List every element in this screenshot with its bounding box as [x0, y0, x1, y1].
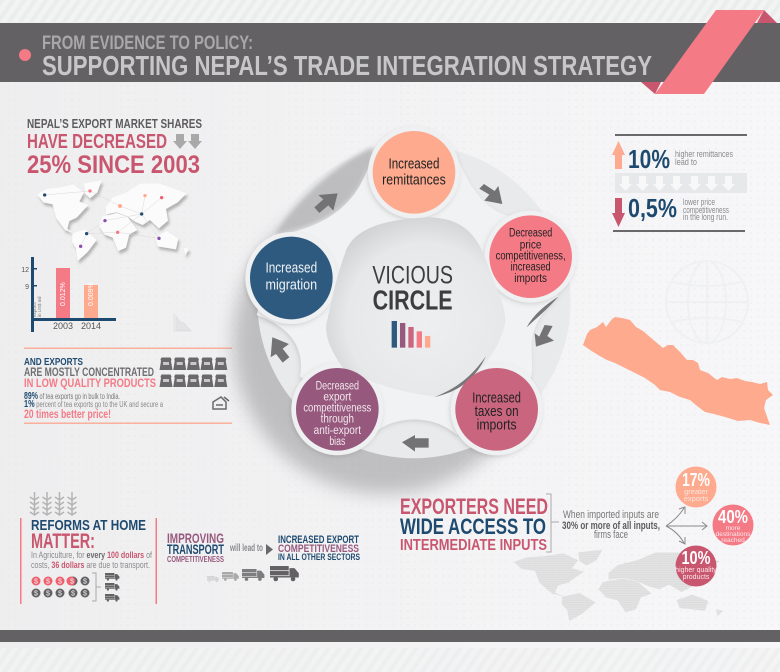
- icon: dollar coins: $: [70, 578, 74, 586]
- icon: globe: [666, 261, 748, 343]
- panel: low quality products: [24, 348, 232, 424]
- text: improving transport: [167, 530, 224, 564]
- circle: increased remittances: Increased: [388, 155, 439, 172]
- header band: [0, 10, 780, 94]
- text block: IN LOW QUALITY PRODUCTS: [24, 378, 156, 390]
- heading: WIDE ACCESS TO: [400, 514, 546, 539]
- bar chart: 0.012%: [60, 282, 67, 306]
- text: increased export: COMPETITIVENESS: [278, 543, 359, 555]
- icon: dollar coins: $: [71, 590, 75, 598]
- circle: decreased price competitiveness: competitiveness,: [496, 248, 566, 262]
- inner well: [326, 217, 505, 397]
- bar chart: exports: [32, 301, 37, 317]
- icon: dollar coins: $: [83, 590, 87, 598]
- connecting plate: [257, 150, 558, 435]
- circle: decreased price competitiveness: Decreased: [509, 226, 552, 240]
- text block: AND EXPORTS: [24, 356, 83, 368]
- stat: 40 percent: reached: [721, 537, 745, 544]
- text block: costs, 36 dollars are due to transport.: [31, 560, 150, 571]
- will lead to: will lead to: [229, 543, 263, 554]
- stat: 10 percent: higher quality: [675, 567, 717, 574]
- text block: 20 times better price!: [24, 407, 111, 421]
- text block: firms face: [594, 529, 628, 541]
- stat: 40 percent: [712, 504, 754, 546]
- circle halos: [245, 126, 577, 455]
- center title: [372, 261, 453, 315]
- circle: decreased export competitiveness: bias: [329, 434, 345, 448]
- text: improving transport: TRANSPORT: [167, 541, 224, 557]
- circle: increased remittances: [373, 131, 455, 214]
- stat: 10 percent: products: [683, 574, 710, 581]
- text block: When imported inputs are: [563, 509, 659, 521]
- circle: decreased price competitiveness: [489, 215, 572, 298]
- circle: increased taxes on imports: taxes on: [475, 403, 519, 420]
- icon: small trucks: [105, 573, 119, 602]
- header bullet: [19, 49, 31, 61]
- icon: dollar coins: $: [46, 578, 50, 586]
- icon: dollar coins: $: [46, 590, 50, 598]
- ribbon: [641, 10, 777, 94]
- circle: decreased export competitiveness: export: [323, 390, 352, 404]
- icon: dollar coins: [32, 576, 90, 598]
- bar chart: [21, 257, 116, 332]
- circle: decreased price competitiveness: increased: [511, 260, 551, 274]
- stat: 17 percent: greater: [684, 487, 708, 496]
- icon: dollar coins: $: [58, 590, 62, 598]
- circle: increased migration: [250, 237, 333, 319]
- footer band: [0, 630, 780, 642]
- heading: REFORMS AT HOME: [31, 517, 146, 534]
- icon: dollar coins: $: [34, 590, 38, 598]
- center title: CIRCLE: [373, 284, 453, 315]
- heading: [31, 517, 146, 553]
- circle: increased migration: migration: [265, 276, 317, 293]
- circle: decreased export competitiveness: through: [321, 412, 354, 426]
- outer disc: [257, 145, 571, 458]
- text block: [24, 356, 163, 421]
- stat: 40 percent: 40%: [718, 507, 748, 527]
- stat: 40 percent: more: [726, 525, 741, 532]
- circle: increased taxes on imports: [455, 368, 538, 451]
- circle: increased migration: Increased: [265, 260, 317, 277]
- center bar icon: [392, 321, 430, 348]
- icon: dollar coins: $: [83, 578, 87, 586]
- circle: increased taxes on imports: Increased: [472, 389, 521, 406]
- icon: down arrows: [173, 134, 202, 149]
- bar chart: 2003: [53, 321, 73, 331]
- bracket arrow: [546, 494, 559, 552]
- text: improving transport: COMPETITIVENESS: [167, 554, 224, 564]
- circle: increased remittances: remittances: [382, 171, 446, 188]
- bar chart: 9: [25, 284, 29, 291]
- text block: In Agriculture, for every 100 dollars of: [31, 550, 152, 561]
- stat: 10 percent: [628, 144, 733, 174]
- stat: 0,5 percent: competitiveness: [683, 205, 729, 215]
- down arrows strip: [615, 173, 747, 193]
- map: Nepal: [583, 317, 773, 425]
- bar chart: in US$ mil: [37, 296, 42, 317]
- bar chart: 2014: [81, 321, 101, 331]
- world map: [37, 180, 189, 261]
- panel: remittances stats: [612, 134, 747, 232]
- panel: export market shares: [21, 116, 202, 332]
- heading: [400, 494, 548, 554]
- dotted world map: [514, 550, 723, 621]
- branching arrows: [666, 507, 707, 544]
- heading: MATTER:: [31, 530, 95, 553]
- text block: 30% or more of all inputs,: [562, 520, 660, 532]
- text: increased export: [278, 534, 360, 562]
- text block: [562, 509, 660, 541]
- circle: decreased export competitiveness: competitiveness: [303, 401, 371, 415]
- text block: ARE MOSTLY CONCENTRATED: [24, 367, 154, 379]
- stat: 17 percent: exports: [684, 494, 709, 503]
- text block: 1% percent of tea exports go to the UK and secure a: [24, 399, 163, 410]
- bar chart: 12: [21, 267, 29, 274]
- text: improving transport: IMPROVING: [167, 530, 224, 546]
- heading: NEPAL’S EXPORT MARKET SHARES: [27, 116, 202, 131]
- text block: 89% of tea exports go in bulk to India.: [24, 391, 120, 402]
- icon: wheat: [30, 492, 76, 515]
- stat: 0,5 percent: lower price: [683, 197, 715, 207]
- text: increased export: IN ALL OTHER SECTORS: [278, 552, 360, 562]
- circle: decreased price competitiveness: imports: [514, 271, 547, 285]
- stat: 10 percent: [675, 546, 717, 586]
- bar chart: 0.009%: [88, 282, 95, 306]
- stat: 17 percent: [676, 466, 716, 508]
- stat: 0,5 percent: [628, 193, 729, 223]
- heading: [27, 116, 202, 179]
- cast shadow: [233, 190, 537, 494]
- fold creases: [434, 297, 558, 397]
- circle: decreased price competitiveness: price: [520, 237, 542, 251]
- panel: improving transport: [167, 530, 360, 582]
- panel: exporters need access: [400, 466, 754, 586]
- title: [42, 33, 652, 81]
- heading: EXPORTERS NEED: [400, 494, 548, 519]
- icon: export box: [213, 397, 229, 409]
- stat: 0,5 percent: in the long run.: [683, 212, 728, 222]
- stat: 10 percent: 10%: [628, 144, 670, 174]
- stat: 10 percent: 10%: [682, 548, 710, 568]
- icon: down arrow: [612, 198, 625, 227]
- vicious circle diagram: [233, 126, 577, 494]
- circle: decreased export competitiveness: anti-export: [314, 423, 362, 437]
- curl shadow: [273, 147, 373, 235]
- stat: 0,5 percent: 0,5%: [628, 193, 677, 223]
- stat: 40 percent: destinations: [716, 531, 751, 538]
- icon: dollar coins: $: [58, 578, 62, 586]
- center title: VICIOUS: [372, 261, 453, 289]
- stat: 10 percent: higher remittances: [675, 149, 733, 159]
- icon: dollar coins: $: [34, 578, 38, 586]
- text block: [31, 550, 152, 571]
- icon: up arrow: [612, 141, 625, 169]
- text: increased export: INCREASED EXPORT: [278, 534, 359, 546]
- circle: decreased export competitiveness: Decreased: [316, 378, 359, 392]
- panel: reforms at home: [20, 492, 157, 604]
- icon: growing trucks: [207, 566, 299, 582]
- bracket arrow: [92, 573, 101, 601]
- stat: 10 percent: lead to: [675, 157, 697, 167]
- circle: decreased export competitiveness: [296, 368, 379, 451]
- title: FROM EVIDENCE TO POLICY:: [42, 33, 253, 54]
- cycle arrows: [271, 184, 554, 452]
- heading: INTERMEDIATE INPUTS: [400, 537, 547, 554]
- heading: HAVE DECREASED: [27, 131, 167, 153]
- stat: 17 percent: 17%: [682, 470, 710, 490]
- circle: increased taxes on imports: imports: [477, 417, 517, 434]
- icon: tea bags: [160, 358, 227, 387]
- heading: 25% SINCE 2003: [27, 151, 200, 179]
- icon: faded chart: [174, 313, 192, 331]
